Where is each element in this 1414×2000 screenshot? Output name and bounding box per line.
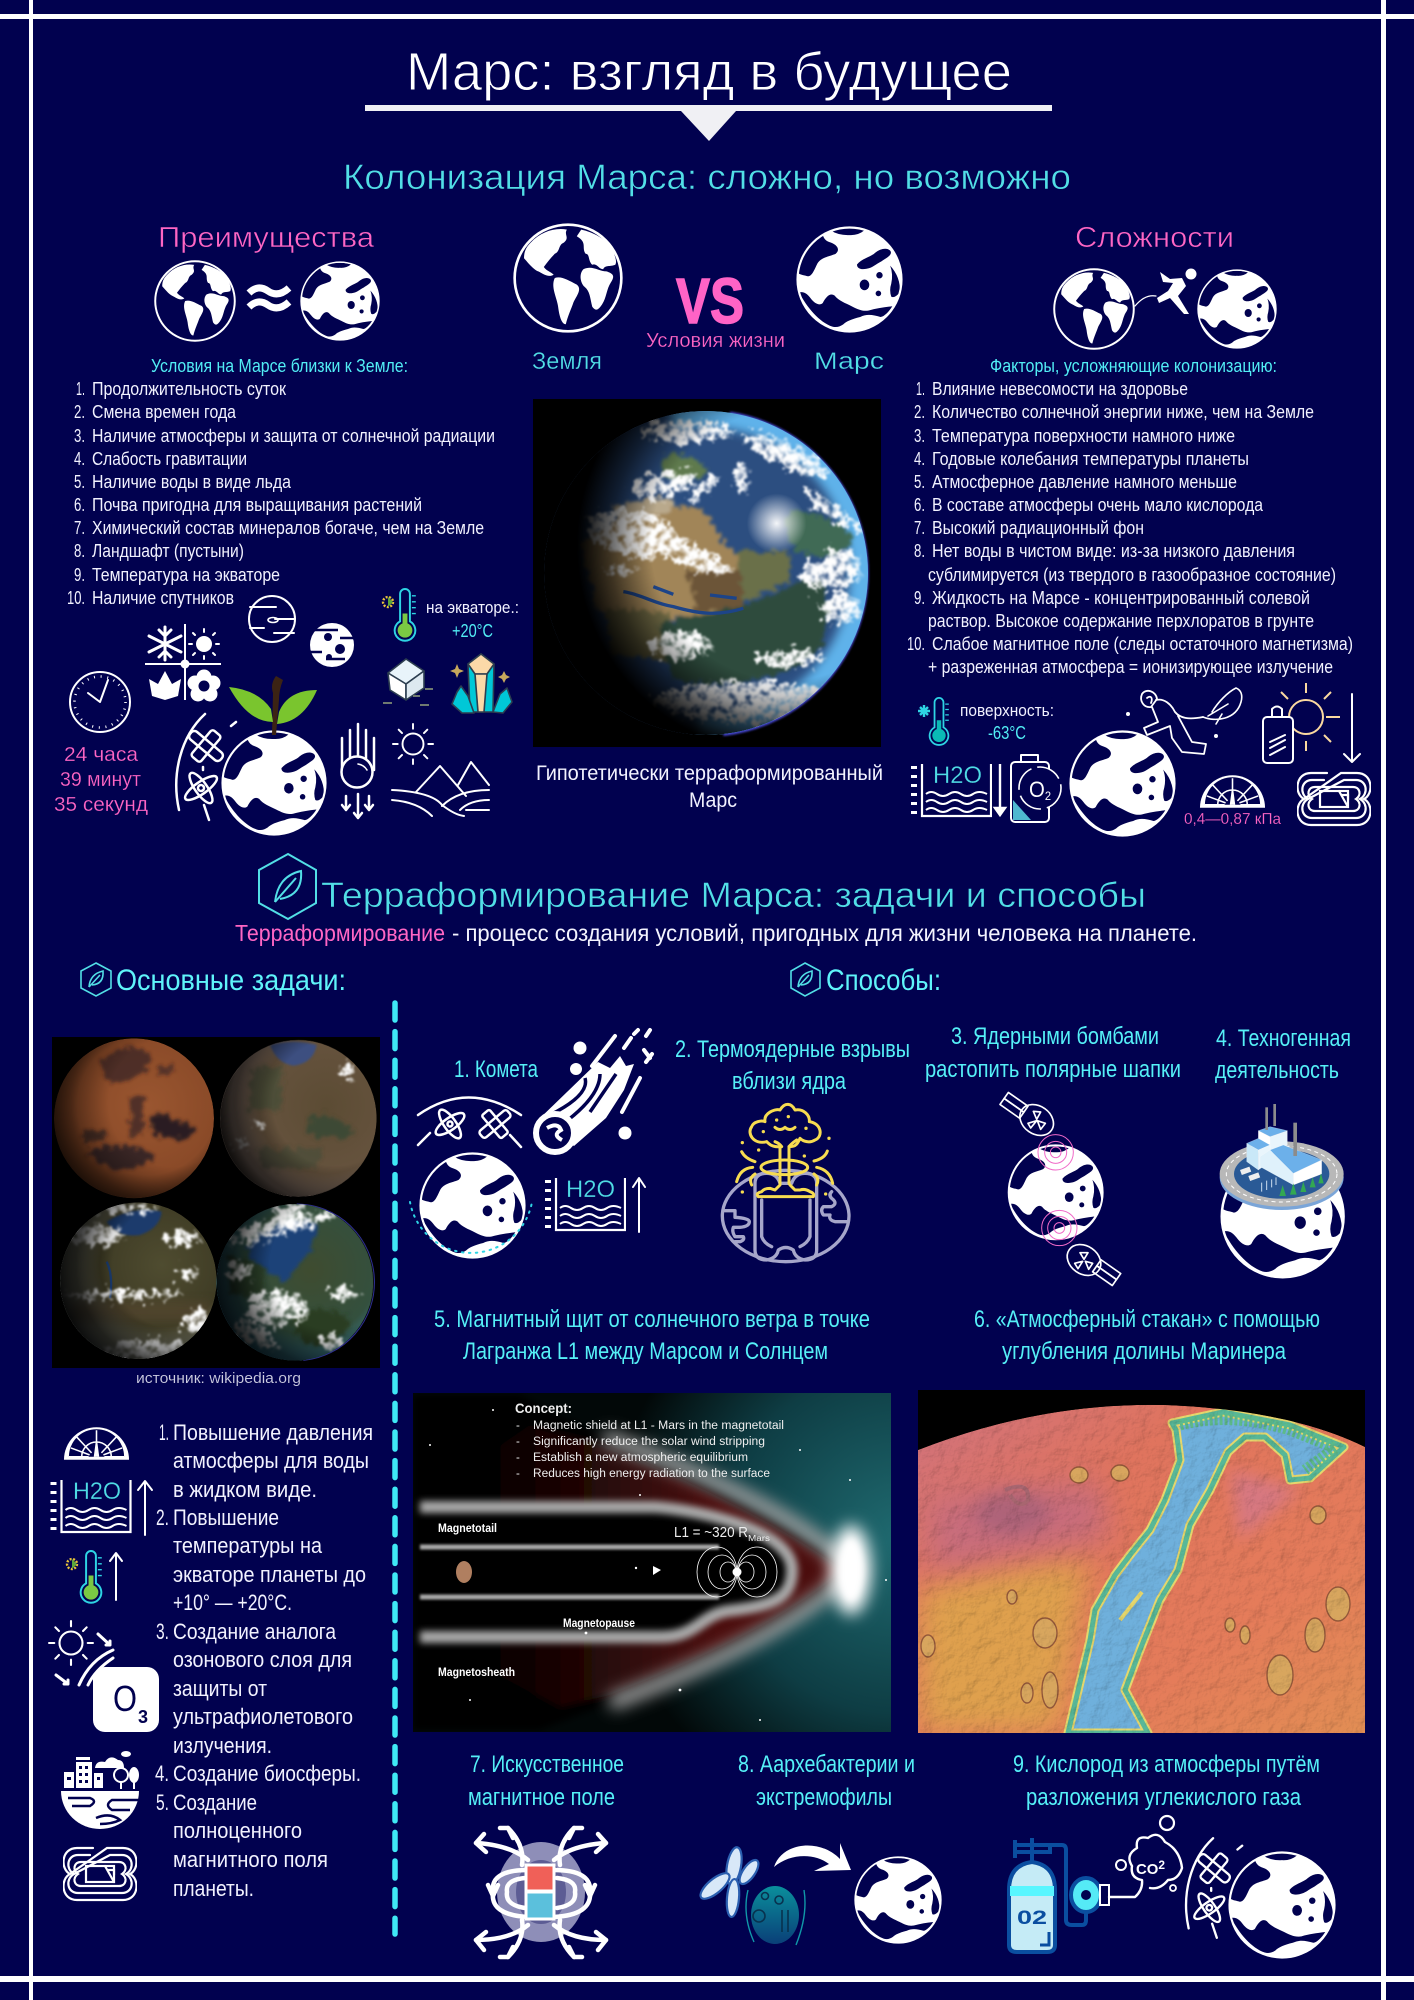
title: Марс: взгляд в будущее <box>406 42 1012 102</box>
list of tasks: +10° — +20°C. <box>173 1590 292 1615</box>
icon: leaf hexagon small <box>81 963 111 996</box>
image: magnetosphere diagram: Magnetic shield at L1 - Mars in the magnetotail <box>533 1420 784 1432</box>
list of advantages: Слабость гравитации <box>92 449 247 469</box>
icon: gravity ball <box>342 724 374 818</box>
list of advantages: 3. <box>74 426 85 446</box>
label <box>675 1036 910 1095</box>
terraforming definition: - процесс создания условий, пригодных для жизни человека на планете. <box>452 920 1197 946</box>
list of difficulties: 5. <box>914 472 925 492</box>
list of advantages: 7. <box>74 518 85 538</box>
icon: explosion at core <box>722 1104 849 1262</box>
icon: factory on Mars <box>1220 1104 1344 1278</box>
list of tasks: экваторе планеты до <box>173 1562 366 1587</box>
list of advantages: 4. <box>74 449 85 469</box>
label <box>468 1751 624 1811</box>
image caption <box>536 762 883 812</box>
list of difficulties: Атмосферное давление намного меньше <box>932 472 1237 492</box>
list of tasks: озонового слоя для <box>173 1647 352 1672</box>
heading: difficulties: Сложности <box>1075 222 1234 254</box>
list of advantages: Смена времен года <box>92 402 237 422</box>
image: Valles Marineris relief <box>918 1390 1365 1733</box>
icon: Earth large <box>515 225 621 331</box>
image: magnetosphere diagram: Magnetopause <box>563 1618 635 1630</box>
equator temperature: +20°C <box>452 621 493 641</box>
list of tasks: температуры на <box>173 1533 323 1558</box>
icon: gauge <box>1071 1878 1109 1912</box>
label: 8. Аархебактерии и <box>738 1751 915 1778</box>
label <box>434 1306 870 1365</box>
list of advantages: Химический состав минералов богаче, чем на Земле <box>92 518 484 538</box>
label <box>925 1023 1181 1083</box>
list of difficulties: В составе атмосферы очень мало кислорода <box>932 495 1264 515</box>
heading: methods: Способы: <box>826 964 941 997</box>
image: magnetosphere diagram: Magnetotail <box>438 1523 497 1535</box>
list of difficulties: Температура поверхности намного ниже <box>932 426 1235 446</box>
list of difficulties: раствор. Высокое содержание перхлоратов в грунте <box>928 611 1314 631</box>
list of difficulties: 2. <box>914 402 925 422</box>
list of advantages: Почва пригодна для выращивания растений <box>92 495 422 515</box>
label: 9. Кислород из атмосферы путём <box>1013 1751 1320 1778</box>
list of tasks: Повышение <box>173 1505 279 1530</box>
image: magnetosphere diagram <box>413 1393 891 1732</box>
image: magnetosphere diagram: Mars <box>748 1534 770 1543</box>
time label <box>54 744 148 816</box>
label: магнитное поле <box>468 1784 615 1811</box>
icon: satellites over Mars <box>418 1098 521 1148</box>
section heading: terraforming: Терраформирование Марса: задачи и способы <box>321 876 1146 915</box>
icon: water tank up: H2O <box>73 1478 121 1505</box>
method 3: nuclear bombs <box>925 1023 1181 1286</box>
label: Лагранжа L1 между Марсом и Солнцем <box>463 1338 828 1365</box>
label: 7. Искусственное <box>470 1751 624 1778</box>
surface label: поверхность: <box>960 701 1054 720</box>
icon: Mars <box>855 1857 941 1943</box>
list of tasks: Создание аналога <box>173 1619 337 1644</box>
icon: water tank up <box>545 1176 645 1232</box>
list of tasks: 2. <box>156 1505 169 1530</box>
equator label: на экваторе.: <box>426 598 519 617</box>
icon: water tank down <box>911 762 1005 816</box>
icon: ozone layer: 3 <box>138 1707 148 1727</box>
label: 4. Техногенная <box>1216 1025 1351 1052</box>
icon: Mars large <box>797 227 902 332</box>
image source caption: источник: wikipedia.org <box>136 1370 301 1387</box>
method 4: technogenic <box>1215 1025 1351 1278</box>
method 7: artificial magnetic field <box>468 1751 624 1957</box>
list of difficulties: Слабое магнитное поле (следы остаточного магнетизма) <box>932 634 1353 654</box>
method 9: oxygen from CO2 <box>1009 1751 1335 1958</box>
list of tasks <box>155 1420 373 1901</box>
list of tasks: Повышение давления <box>173 1420 373 1445</box>
image: magnetosphere diagram: - <box>516 1436 520 1448</box>
panel: central comparison <box>515 225 902 812</box>
list of difficulties: + разреженная атмосфера = ионизирующее излучение <box>928 657 1333 677</box>
panel: main tasks <box>49 963 380 1901</box>
list of difficulties: Влияние невесомости на здоровье <box>932 379 1188 399</box>
panel: advantages <box>54 222 519 835</box>
image: four stages of terraforming <box>52 1037 380 1368</box>
icon: Earth kicked to Mars <box>1054 268 1276 349</box>
label: вблизи ядра <box>732 1068 847 1095</box>
label: экстремофилы <box>756 1784 892 1811</box>
label <box>738 1751 915 1811</box>
list of tasks: ультрафиолетового <box>173 1704 353 1729</box>
icon: surface thermometer <box>918 698 949 745</box>
list of tasks: магнитного поля <box>173 1847 328 1872</box>
icon: Mars with ring <box>410 1153 532 1258</box>
time label: 39 минут <box>60 769 141 791</box>
pressure label: 0,4—0,87 кПа <box>1184 811 1281 828</box>
list of tasks: 1. <box>159 1420 169 1445</box>
list of tasks: 3. <box>156 1619 169 1644</box>
label: living conditions: Условия жизни <box>646 330 785 352</box>
icon: ozone layer <box>49 1621 159 1732</box>
list of advantages: Наличие спутников <box>92 588 234 608</box>
icon: Mars on difficulties <box>1070 731 1175 836</box>
list of tasks: Создание биосферы. <box>173 1761 361 1786</box>
method 5: magnetic shield <box>413 1306 891 1732</box>
panel: methods <box>410 963 1365 1958</box>
list of difficulties: 7. <box>914 518 925 538</box>
list of advantages: 1. <box>76 379 85 399</box>
label: Mars: Марс <box>814 348 884 375</box>
image: magnetosphere diagram: - <box>516 1452 520 1464</box>
list of advantages: 9. <box>74 565 85 585</box>
icon: oxygen tank <box>1009 1838 1086 1952</box>
image caption: Марс <box>689 789 737 812</box>
icon: comet <box>536 1030 652 1152</box>
list of advantages: Продолжительность суток <box>92 379 286 399</box>
list of advantages <box>67 379 495 608</box>
list of difficulties: 10. <box>907 634 925 654</box>
icon: Mars with bombs <box>1000 1092 1121 1286</box>
label: Earth: Земля <box>532 348 602 375</box>
image: magnetosphere diagram: L1 = ~320 R <box>674 1524 748 1541</box>
list heading: Условия на Марсе близки к Земле: <box>151 356 408 376</box>
image: magnetosphere diagram: - <box>516 1420 520 1432</box>
label: 3. Ядерными бомбами <box>951 1023 1159 1050</box>
label <box>1215 1025 1351 1084</box>
list of difficulties: 1. <box>916 379 925 399</box>
method 8: extremophiles <box>697 1751 941 1945</box>
icon: astronaut with feather <box>1126 688 1242 754</box>
label: 2. Термоядерные взрывы <box>675 1036 910 1063</box>
list of difficulties: Нет воды в чистом виде: из-за низкого давления <box>932 541 1295 561</box>
image: magnetosphere diagram: - <box>516 1468 520 1480</box>
list of difficulties: 3. <box>914 426 925 446</box>
icon: pressure gauge up <box>64 1427 129 1460</box>
image caption: Гипотетически терраформированный <box>536 762 883 785</box>
icon: water tank up <box>50 1478 152 1535</box>
icon: oxygen battery: 2 <box>1045 789 1051 803</box>
heading: advantages: Преимущества <box>158 222 375 254</box>
surface temperature: -63°C <box>988 723 1026 743</box>
icon: water tank down: H2O <box>933 762 982 789</box>
list of advantages: 5. <box>74 472 85 492</box>
label: 5. Магнитный щит от солнечного ветра в точке <box>434 1306 870 1333</box>
list of difficulties: сублимируется (из твердого в газообразное состояние) <box>928 565 1336 585</box>
list of tasks: в жидком виде. <box>173 1477 317 1502</box>
icon: water tank up: H2O <box>566 1176 615 1203</box>
list of tasks: 4. <box>155 1761 169 1786</box>
time label: 35 секунд <box>54 794 148 816</box>
icon: oxygen battery: O <box>1029 777 1046 802</box>
icon: sun and mountains <box>392 724 489 816</box>
icon: ozone layer: O <box>113 1678 137 1719</box>
list of difficulties: 8. <box>914 541 925 561</box>
VS mark: VS <box>676 265 744 337</box>
list of tasks: излучения. <box>173 1733 272 1758</box>
label: разложения углекислого газа <box>1026 1784 1302 1811</box>
icon: biosphere <box>61 1751 139 1829</box>
image: magnetosphere diagram: Magnetosheath <box>438 1667 515 1679</box>
icon: Mars <box>1229 1852 1335 1958</box>
list of difficulties: 6. <box>914 495 925 515</box>
arrow: bacteria to Mars <box>774 1843 851 1871</box>
image: magnetosphere diagram: Establish a new atmospheric equilibrium <box>533 1452 748 1464</box>
icon: Earth similar to Mars <box>155 261 379 341</box>
icon: pressure gauge <box>1200 775 1265 808</box>
icon: ice cube <box>383 659 433 705</box>
list of difficulties: Жидкость на Марсе - концентрированный солевой <box>932 588 1310 608</box>
icon: seasons <box>145 624 221 702</box>
list of tasks: планеты. <box>173 1876 254 1901</box>
list of tasks: 5. <box>156 1790 169 1815</box>
icon: CO2 cloud <box>1109 1816 1182 1897</box>
list of tasks: Создание <box>173 1790 257 1815</box>
list of advantages: Ландшафт (пустыни) <box>92 541 244 561</box>
image: magnetosphere diagram: Concept: <box>515 1400 572 1416</box>
icon: satellites arc <box>1185 1838 1242 1938</box>
dashed divider <box>392 1003 398 1934</box>
icon: oxygen tank: 02 <box>1017 1908 1047 1929</box>
image: magnetosphere diagram: Significantly reduce the solar wind stripping <box>533 1436 765 1448</box>
label <box>1013 1751 1320 1811</box>
icon: magnetic field <box>64 1848 136 1900</box>
list of advantages: Температура на экваторе <box>92 565 280 585</box>
icon: Mars with plant <box>222 676 326 835</box>
method 6: atmospheric glass <box>918 1306 1365 1733</box>
list of advantages: 2. <box>74 402 85 422</box>
icon: magnetic field weak <box>1298 773 1370 825</box>
subtitle: colonization: Колонизация Марса: сложно, но возможно <box>343 158 1071 197</box>
image: magnetosphere diagram: Reduces high energy radiation to the surface <box>533 1468 770 1480</box>
list of tasks: защиты от <box>173 1676 267 1701</box>
list of advantages: 8. <box>74 541 85 561</box>
image: terraformed Mars <box>533 399 881 747</box>
panel: difficulties <box>907 222 1370 836</box>
list of advantages: Наличие атмосферы и защита от солнечной радиации <box>92 426 495 446</box>
label <box>974 1306 1320 1365</box>
icon: CO2 cloud: 2 <box>1158 1858 1165 1872</box>
list of difficulties: 4. <box>914 449 925 469</box>
icon: equator thermometer <box>383 589 416 641</box>
time label: 24 часа <box>64 744 139 766</box>
list of difficulties: Высокий радиационный фон <box>932 518 1144 538</box>
label: 1. Комета <box>454 1056 539 1083</box>
icon: crystals <box>450 654 512 713</box>
label: растопить полярные шапки <box>925 1056 1181 1083</box>
icon: battery and weak sun <box>1263 683 1360 763</box>
list heading: Факторы, усложняющие колонизацию: <box>990 356 1277 376</box>
list of advantages: 10. <box>67 588 85 608</box>
label: углубления долины Маринера <box>1002 1338 1287 1365</box>
list of difficulties: Количество солнечной энергии ниже, чем на Земле <box>932 402 1314 422</box>
icon: moons <box>249 596 355 667</box>
list of difficulties: 9. <box>914 588 925 608</box>
icon: bacteria <box>697 1846 805 1945</box>
icon: CO2 cloud: CO <box>1136 1861 1158 1878</box>
list of difficulties: Годовые колебания температуры планеты <box>932 449 1249 469</box>
list of difficulties <box>907 379 1353 677</box>
icon: satellites arc <box>175 714 236 820</box>
heading icon: leaf hexagon <box>259 854 316 919</box>
terraforming definition: Терраформирование <box>235 920 445 946</box>
list of advantages: 6. <box>74 495 85 515</box>
title underline with pointer <box>365 105 1052 141</box>
method 1: comet <box>410 1030 652 1258</box>
icon: thermometer up <box>67 1551 122 1603</box>
list of tasks: полноценного <box>173 1818 302 1843</box>
icon: leaf hexagon small <box>791 963 820 996</box>
list of advantages: Наличие воды в виде льда <box>92 472 292 492</box>
heading: main tasks: Основные задачи: <box>116 964 346 997</box>
icon: oxygen battery <box>1011 755 1061 822</box>
icon: clock <box>70 672 130 732</box>
method 2: thermonuclear <box>675 1036 910 1262</box>
icon: magnet field lines <box>476 1828 606 1957</box>
list of tasks: атмосферы для воды <box>173 1448 369 1473</box>
label: 6. «Атмосферный стакан» с помощью <box>974 1306 1320 1333</box>
label: деятельность <box>1215 1057 1339 1084</box>
